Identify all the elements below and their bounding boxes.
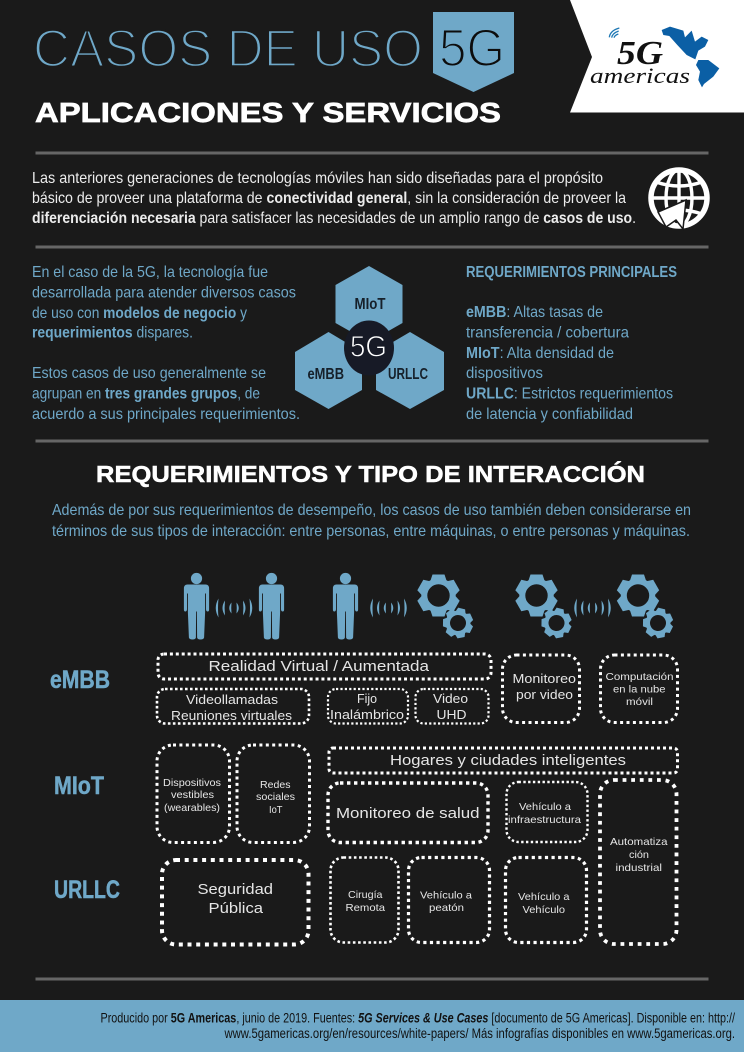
box: Automatización industrial: Automatiza — [610, 836, 668, 848]
text block: main requirements: de latencia y confiabilidad — [466, 406, 633, 423]
hexagon: eMBB — [295, 332, 362, 409]
text block: main requirements: dispositivos — [466, 365, 543, 382]
box: Automatización industrial — [600, 780, 676, 944]
row label: MIoT: MIoT — [54, 772, 104, 800]
box: Redes sociales IoT: Redes — [260, 779, 290, 791]
box: Video UHD: UHD — [436, 707, 466, 722]
box: Dispositivos vestibles — [157, 745, 230, 842]
icon: globe with arrow — [651, 170, 707, 229]
box: Cirugía Remota: Remota — [346, 902, 385, 914]
title: Casos de uso: CASOS DE USO — [33, 20, 423, 78]
box: Vehículo a infraestructura — [506, 782, 588, 842]
box: Monitoreo de salud: Monitoreo de salud — [336, 805, 480, 822]
box: Videollamadas / Reuniones virtuales: Videollamadas — [186, 692, 279, 707]
box: Seguridad Pública — [162, 860, 308, 944]
row label: eMBB: eMBB — [50, 666, 110, 694]
hexagon: MIoT — [336, 266, 402, 342]
box: Videollamadas / Reuniones virtuales — [157, 689, 309, 724]
box: Automatización industrial: industrial — [616, 862, 662, 874]
box: Videollamadas / Reuniones virtuales: Reuniones virtuales — [171, 708, 293, 723]
intro paragraph: Las anteriores generaciones de tecnologías móviles han sido diseñadas para el propósito — [32, 170, 603, 187]
box: Seguridad Pública: Seguridad — [198, 881, 273, 898]
text block: 5G description: agrupan en tres grandes grupos, de — [32, 386, 260, 402]
center circle: 5G — [344, 320, 394, 376]
hexagon: MIoT: MIoT — [354, 296, 386, 313]
box: Vehículo a peatón — [408, 858, 490, 942]
text block: 5G description: En el caso de la 5G, la tecnología fue — [32, 264, 268, 281]
box: Vehículo a Vehículo — [506, 858, 586, 942]
box: Monitoreo por video: por video — [516, 687, 573, 702]
intro paragraph: básico de proveer una plataforma de conectividad general, sin la consideración de proveer la — [32, 190, 626, 207]
box: Computación en la nube móvil: móvil — [626, 696, 653, 708]
icon: person to machine — [333, 573, 477, 642]
hexagon: URLLC — [376, 332, 444, 409]
box: Vehículo a Vehículo: Vehículo — [522, 904, 565, 916]
text block: main requirements: eMBB: Altas tasas de — [466, 304, 603, 321]
box: Monitoreo por video — [502, 655, 580, 722]
row label: URLLC: URLLC — [54, 876, 120, 904]
box: Video UHD: Video — [433, 691, 468, 706]
text block: 5G description: acuerdo a sus principales requerimientos. — [32, 406, 300, 423]
box: Vehículo a infraestructura: Vehículo a — [519, 801, 571, 813]
text block: 5G description: Estos casos de uso generalmente se — [32, 365, 266, 382]
box: Computación en la nube móvil: Computación — [606, 671, 674, 683]
text block: interaction intro — [52, 502, 691, 540]
text block: 5G description: requerimientos dispares. — [32, 324, 193, 342]
footer: credits and sources — [0, 1000, 744, 1052]
box: Vehículo a peatón: peatón — [429, 902, 464, 914]
text block: main requirements: REQUERIMIENTOS PRINCIPALES — [466, 264, 677, 281]
logo: 5G Americas: 5G — [617, 35, 663, 72]
box: Automatización industrial: ción — [629, 849, 649, 861]
box: Seguridad Pública: Pública — [208, 900, 264, 917]
box: Realidad Virtual / Aumentada — [158, 654, 491, 679]
box: Vehículo a peatón: Vehículo a — [420, 890, 472, 902]
subtitle: Aplicaciones y servicios: APLICACIONES Y SERVICIOS — [35, 97, 501, 128]
box: Dispositivos vestibles: (wearables) — [164, 802, 220, 814]
box: Cirugía Remota — [330, 858, 398, 942]
text block: main requirements — [466, 264, 677, 423]
box: Redes sociales IoT: IoT — [269, 804, 283, 816]
box: Hogares y ciudades inteligentes: Hogares y ciudades inteligentes — [390, 752, 626, 769]
box: Computación en la nube móvil: en la nube — [613, 684, 666, 696]
text block: 5G description — [32, 264, 300, 423]
icon: machine to machine — [514, 574, 677, 642]
hexagon: eMBB: eMBB — [308, 366, 344, 383]
box: Realidad Virtual / Aumentada: Realidad Virtual / Aumentada — [208, 658, 430, 675]
logo: 5G Americas: americas — [590, 63, 690, 88]
icon: person to person — [184, 573, 284, 640]
box: Hogares y ciudades inteligentes — [329, 748, 678, 773]
box: Fijo Inalámbrico — [328, 689, 408, 724]
box: Redes sociales IoT — [237, 745, 310, 842]
text block: main requirements: URLLC: Estrictos requerimientos — [466, 386, 673, 402]
intro paragraph — [32, 170, 636, 227]
box: Vehículo a Vehículo: Vehículo a — [518, 891, 570, 903]
badge: 5G: 5G — [439, 19, 505, 78]
diagram: three use-case hexagons around 5G — [295, 266, 444, 409]
text block: interaction intro: términos de sus tipos de interacción: entre personas, entre máquinas, o entre personas y máquinas. — [52, 523, 690, 540]
box: Fijo Inalámbrico: Fijo — [357, 691, 377, 706]
logo: 5G Americas — [570, 0, 744, 112]
badge: 5G — [433, 12, 514, 92]
box: Dispositivos vestibles: Dispositivos — [163, 777, 221, 789]
box: Video UHD — [416, 689, 488, 724]
box: Vehículo a infraestructura: infraestructura — [508, 814, 581, 826]
box: Monitoreo por video: Monitoreo — [512, 671, 576, 686]
box: Cirugía Remota: Cirugía — [348, 889, 383, 901]
text block: main requirements: MIoT: Alta densidad de — [466, 345, 614, 362]
box: Dispositivos vestibles: vestibles — [171, 789, 214, 801]
box: Computación en la nube móvil — [600, 655, 678, 722]
hexagon: URLLC: URLLC — [388, 366, 428, 383]
intro paragraph: diferenciación necesaria para satisfacer las necesidades de un amplio rango de casos de uso. — [32, 210, 636, 227]
center circle: 5G: 5G — [350, 330, 387, 364]
text block: main requirements: transferencia / cobertura — [466, 324, 629, 342]
box: Fijo Inalámbrico: Inalámbrico — [330, 707, 404, 722]
text block: 5G description: de uso con modelos de negocio y — [32, 305, 247, 322]
box: Monitoreo de salud — [328, 783, 488, 842]
box: Redes sociales IoT: sociales — [256, 791, 295, 803]
heading: requirements and interaction: REQUERIMIENTOS Y TIPO DE INTERACCIÓN — [96, 460, 645, 487]
text block: 5G description: desarrollada para atender diversos casos — [32, 284, 296, 302]
